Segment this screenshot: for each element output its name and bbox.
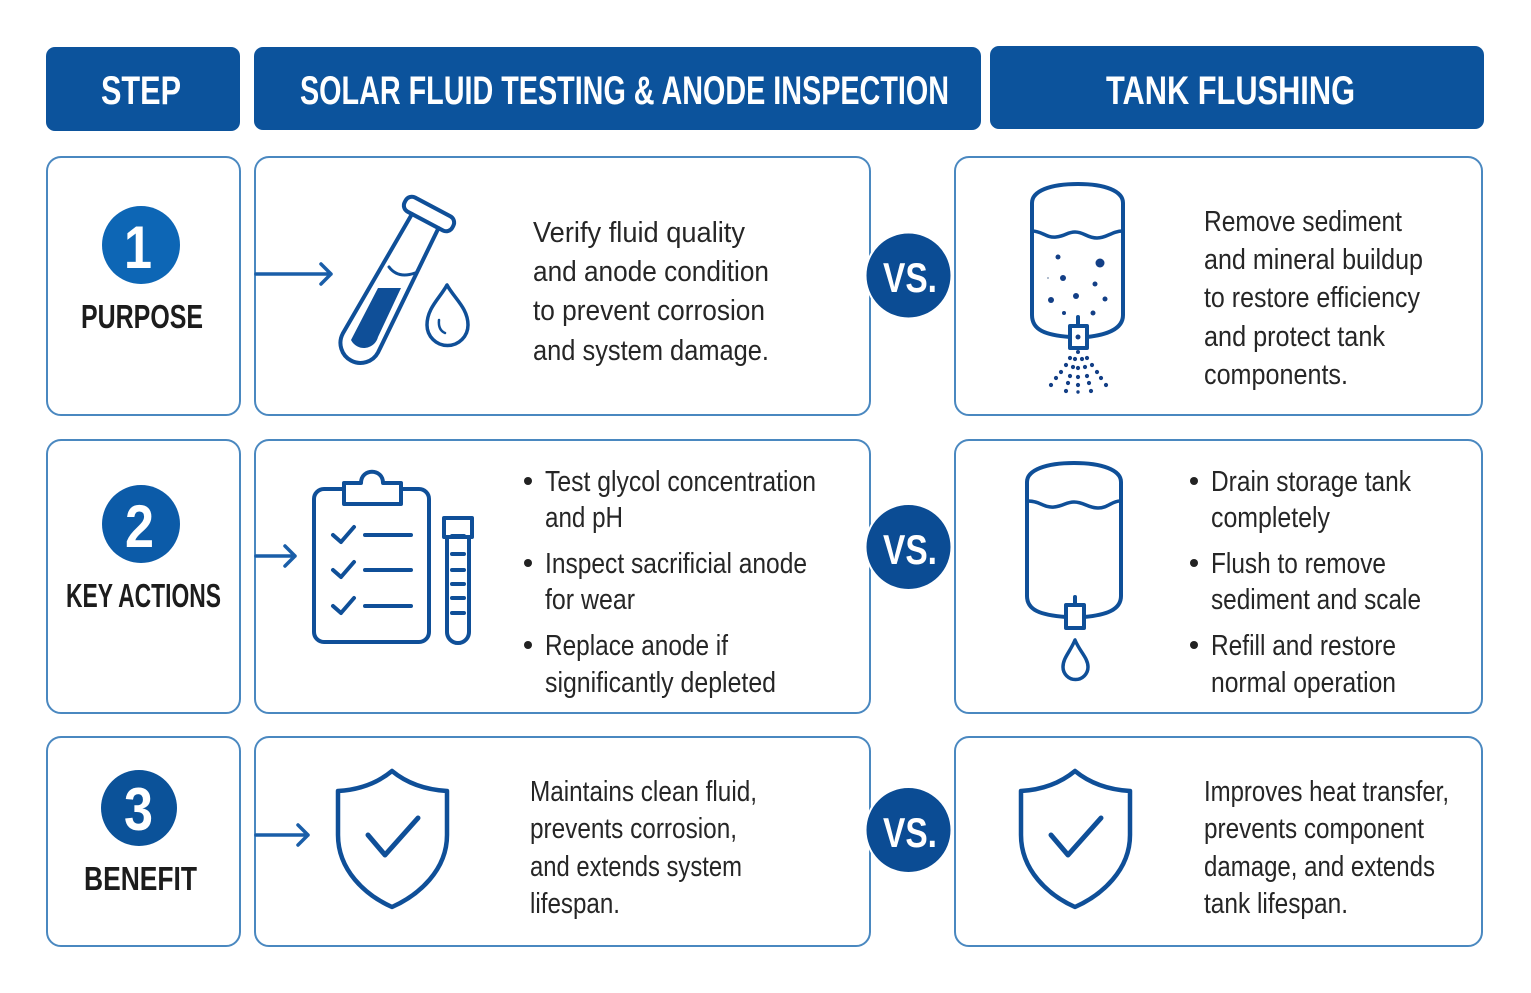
vs badge row 3 xyxy=(866,787,952,873)
text: key actions list: significantly depleted xyxy=(545,667,776,699)
icon: shield with check xyxy=(1021,771,1130,907)
vs badge row 1: VS. xyxy=(883,254,937,301)
panel: step 3 benefit xyxy=(47,737,240,946)
text: tank flushing benefit description: Improves heat transfer, xyxy=(1204,776,1449,808)
label: purpose: PURPOSE xyxy=(81,298,203,335)
text: key actions list xyxy=(524,466,816,699)
text: tank flushing purpose: Remove sediment xyxy=(1204,206,1402,238)
panel: solar fluid key actions xyxy=(255,440,870,713)
panel: step 1 purpose xyxy=(47,157,240,415)
icon: tank draining xyxy=(1027,463,1121,680)
text: tank flushing purpose: and protect tank xyxy=(1204,321,1385,353)
text: purpose description: and system damage. xyxy=(533,335,769,367)
vs badge row 2: VS. xyxy=(883,526,937,573)
text: purpose description xyxy=(533,217,769,367)
text: purpose description: to prevent corrosion xyxy=(533,295,765,327)
icon: tank with sediment and spray xyxy=(1032,184,1123,394)
header: tank flushing xyxy=(990,46,1484,129)
number badge 1 xyxy=(102,206,180,284)
text: tank flushing benefit description xyxy=(1204,776,1449,920)
header: solar fluid testing and anode inspection xyxy=(254,47,981,130)
text: tank flushing actions list: completely xyxy=(1211,502,1330,534)
icon: clipboard checklist and sample vial xyxy=(314,472,472,643)
text: key actions list: Test glycol concentration xyxy=(545,466,816,498)
text: key actions list: Inspect sacrificial anode xyxy=(545,548,807,580)
label: benefit: BENEFIT xyxy=(84,860,197,897)
panel: purpose of solar fluid testing xyxy=(255,157,870,415)
icon: test tube and drop xyxy=(327,194,468,373)
text: tank flushing purpose: and mineral buildup xyxy=(1204,244,1423,276)
text: tank flushing actions list: Drain storage tank xyxy=(1211,466,1411,498)
header: solar fluid testing and anode inspection: SOLAR FLUID TESTING & ANODE INSPECTION xyxy=(300,69,949,113)
text: benefit description: Maintains clean fluid, xyxy=(530,776,757,808)
text: benefit description: and extends system xyxy=(530,851,742,883)
number badge 2: 2 xyxy=(125,493,154,560)
text: tank flushing actions list: Flush to remove xyxy=(1211,548,1386,580)
header: step xyxy=(46,47,240,131)
number badge 1: 1 xyxy=(124,214,152,281)
header row xyxy=(46,46,1484,131)
number badge 3: 3 xyxy=(124,776,153,843)
text: benefit description: lifespan. xyxy=(530,888,620,920)
panel: purpose of tank flushing xyxy=(955,157,1482,415)
icon: shield with check xyxy=(338,771,447,907)
text: tank flushing actions list: Refill and restore xyxy=(1211,630,1396,662)
text: purpose description: Verify fluid quality xyxy=(533,217,745,249)
number badge 2 xyxy=(102,485,180,563)
text: tank flushing actions list: sediment and scale xyxy=(1211,584,1421,616)
arrow xyxy=(256,264,331,284)
label: key actions: KEY ACTIONS xyxy=(66,577,221,614)
header: tank flushing: TANK FLUSHING xyxy=(1106,69,1355,113)
vs badge row 3: VS. xyxy=(883,809,937,856)
text: tank flushing benefit description: prevents component xyxy=(1204,813,1424,845)
text: key actions list: Replace anode if xyxy=(545,630,729,662)
number badge 3 xyxy=(101,770,177,846)
text: tank flushing actions list: normal operation xyxy=(1211,667,1396,699)
panel: tank flushing benefit xyxy=(955,737,1482,946)
vs badge row 2 xyxy=(866,504,952,590)
text: benefit description xyxy=(530,776,757,920)
text: tank flushing purpose: to restore efficiency xyxy=(1204,282,1420,314)
text: tank flushing benefit description: tank lifespan. xyxy=(1204,888,1348,920)
header: step: STEP xyxy=(101,69,181,113)
panel: tank flushing key actions xyxy=(955,440,1482,713)
text: tank flushing purpose xyxy=(1204,206,1423,391)
text: tank flushing benefit description: damage, and extends xyxy=(1204,851,1435,883)
text: benefit description: prevents corrosion, xyxy=(530,813,737,845)
panel: step 2 key actions xyxy=(47,440,240,713)
text: key actions list: for wear xyxy=(545,584,635,616)
arrow xyxy=(256,825,308,845)
arrow xyxy=(256,546,295,566)
panel: solar fluid benefit xyxy=(255,737,870,946)
text: key actions list: and pH xyxy=(545,502,623,534)
text: tank flushing purpose: components. xyxy=(1204,359,1348,391)
text: purpose description: and anode condition xyxy=(533,256,769,288)
text: tank flushing actions list xyxy=(1190,466,1421,699)
vs badge row 1 xyxy=(866,232,952,318)
